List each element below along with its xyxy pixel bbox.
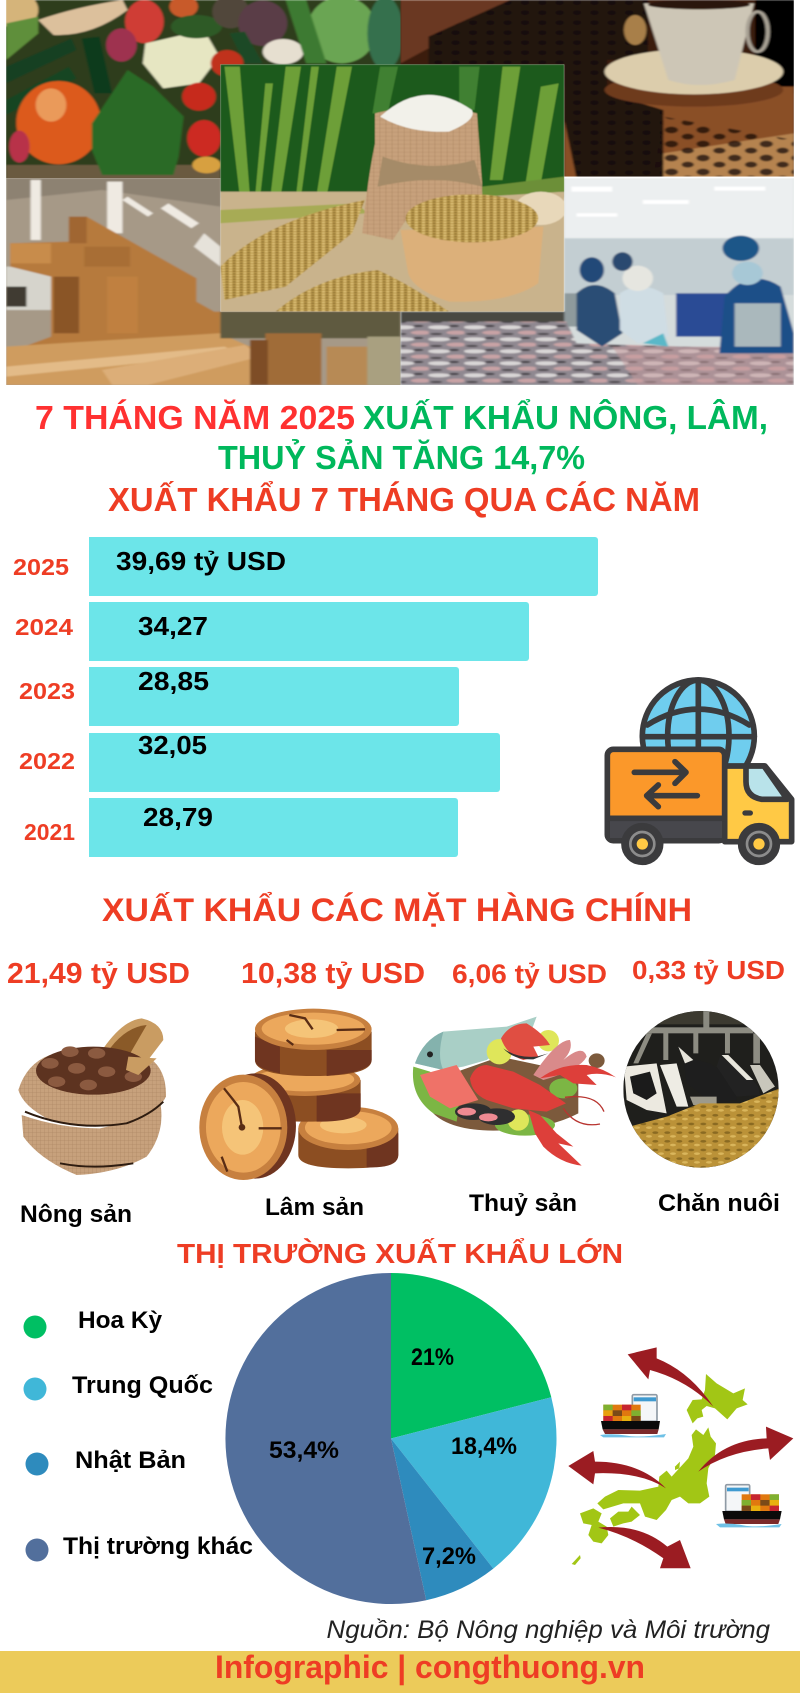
globe [642, 680, 754, 792]
label: forestry: Lâm sản [265, 1194, 364, 1221]
legend dot: China [24, 1378, 46, 1400]
photo: seafood processing workers [398, 177, 796, 387]
title line 1 red: 7 THÁNG NĂM 2025 [35, 399, 355, 436]
photo collage [0, 0, 796, 387]
slice: USA 21% [391, 1273, 551, 1438]
year label 2022: 2022 [19, 748, 75, 774]
slice: other markets 53.4% [225, 1273, 426, 1604]
label: agriculture: Nông sản [20, 1201, 132, 1228]
value: livestock: 0,33 tỷ USD [632, 955, 785, 985]
heading: major export markets: THỊ TRƯỜNG XUẤT KHẨU LỚN [177, 1238, 623, 1269]
footer text: Infographic | congthuong.vn [215, 1649, 645, 1685]
truck cab [725, 766, 792, 842]
legend text: China: Trung Quốc [72, 1372, 213, 1399]
source note: Nguồn: Bộ Nông nghiệp và Môi trường [326, 1616, 770, 1644]
heading: main export products: XUẤT KHẨU CÁC MẶT HÀNG CHÍNH [102, 892, 692, 928]
wheel left [624, 826, 661, 862]
ship: upper left [600, 1395, 666, 1437]
title line 2 green: THUỶ SẢN TĂNG 14,7% [218, 439, 585, 476]
photo: coffee [398, 0, 796, 178]
value 2023: 28,85 [138, 666, 209, 696]
legend dot: Japan [26, 1452, 48, 1476]
slice: Japan 7.2% [391, 1438, 493, 1600]
ship: lower right [716, 1485, 782, 1527]
cargo box [607, 749, 725, 841]
value: forestry: 10,38 tỷ USD [241, 958, 425, 990]
bar 2025 [89, 537, 598, 596]
arrow: east [698, 1427, 793, 1472]
bar 2024 [89, 602, 529, 661]
legend dot: other markets [26, 1538, 48, 1562]
bar 2022 [89, 733, 500, 792]
bar chart: exports by year [13, 537, 598, 857]
legend [24, 1307, 253, 1562]
year label 2023: 2023 [19, 678, 75, 704]
value 2025: 39,69 tỷ USD [116, 546, 286, 576]
legend text: USA: Hoa Kỳ [78, 1307, 163, 1334]
legend text: Japan: Nhật Bản [75, 1447, 186, 1474]
slice: China 18.4% [391, 1397, 557, 1569]
bar 2023 [89, 667, 459, 726]
photo: rice sack and bowl [220, 64, 566, 313]
icon: delivery truck with globe [607, 680, 792, 862]
legend dot: USA [24, 1316, 46, 1338]
label: livestock: Chăn nuôi [658, 1190, 780, 1217]
value: seafood: 6,06 tỷ USD [452, 959, 607, 989]
value 7,2%: 7,2% [422, 1543, 476, 1570]
photo: dairy cows [623, 1011, 780, 1170]
icon: seafood platter [413, 1017, 616, 1166]
bar 2021 [89, 798, 458, 857]
product icons: coffee sack and logs [18, 1009, 398, 1180]
product values [7, 955, 785, 990]
year label 2024: 2024 [15, 614, 73, 640]
heading: exports over the years: XUẤT KHẨU 7 THÁNG QUA CÁC NĂM [108, 481, 700, 518]
wheel right [741, 826, 777, 862]
value 18,4%: 18,4% [451, 1433, 517, 1460]
product labels [20, 1190, 780, 1228]
value 2024: 34,27 [138, 611, 208, 641]
icon: coffee sack [18, 1018, 166, 1175]
title [35, 398, 768, 476]
arrow: north-west [628, 1347, 713, 1407]
label: seafood: Thuỷ sản [469, 1190, 577, 1217]
value 53,4%: 53,4% [269, 1437, 339, 1464]
value 2021: 28,79 [143, 802, 213, 832]
value: agriculture: 21,49 tỷ USD [7, 958, 190, 990]
arrow: west [568, 1451, 666, 1488]
illustration: Japan map with arrows and ships [568, 1347, 793, 1568]
photo: vegetables [0, 0, 408, 180]
photo: timber warehouse [0, 177, 408, 387]
arrow: south-east [598, 1527, 691, 1568]
year label 2025: 2025 [13, 554, 69, 580]
value 21%: 21% [411, 1344, 454, 1371]
map of Japan [572, 1374, 748, 1565]
pie chart: export markets [225, 1273, 557, 1604]
product icons: seafood and cows [413, 1011, 780, 1170]
legend text: other markets: Thị trường khác [63, 1533, 253, 1560]
icon: wood logs [199, 1009, 398, 1180]
footer band [0, 1649, 800, 1693]
value 2022: 32,05 [138, 730, 207, 760]
title line 1 green: XUẤT KHẨU NÔNG, LÂM, [363, 398, 768, 436]
year label 2021: 2021 [24, 819, 75, 845]
